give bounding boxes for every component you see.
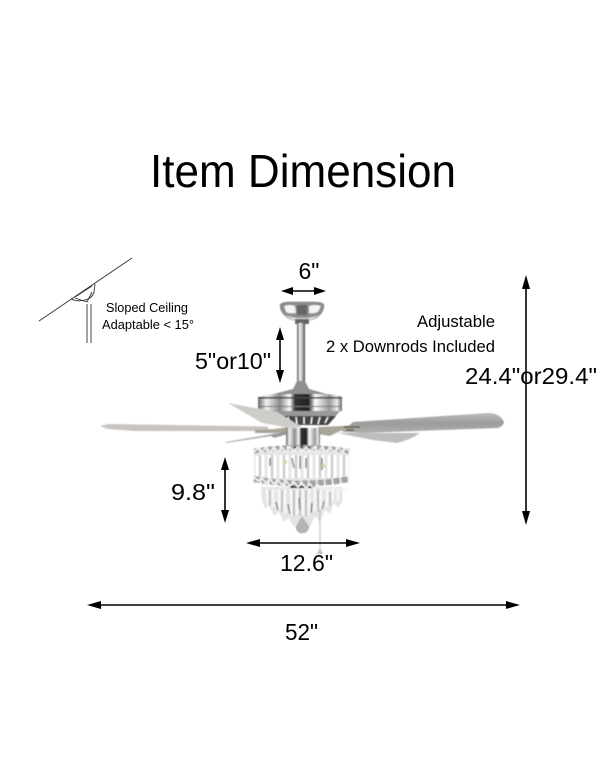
blade brackets [255, 425, 361, 438]
text: adjustable downrods note: 2 x Downrods Included [326, 337, 495, 356]
fan blade: far left long [100, 424, 268, 431]
pull chain [317, 510, 323, 554]
dimension label: light kit width: 12.6" [280, 550, 333, 576]
dimension arrow: light kit height [221, 457, 229, 523]
text: sloped ceiling note [102, 300, 194, 332]
motor housing [258, 381, 342, 425]
crystal chandelier [254, 447, 350, 533]
dimension arrow: light kit width [246, 539, 360, 547]
fan blade: lower left thin [225, 433, 277, 443]
dimension label: 6 inch: 6" [299, 258, 319, 284]
fan blade: upper left [228, 403, 302, 428]
icon: sloped ceiling diagram [39, 258, 132, 343]
ceiling canopy [280, 302, 324, 324]
downrod [297, 323, 305, 383]
light kit cylinder [286, 428, 320, 448]
dimension arrow: overall height [522, 275, 530, 525]
text: sloped ceiling note: Adaptable < 15° [102, 317, 194, 332]
text: sloped ceiling note: Sloped Ceiling [106, 300, 188, 315]
fan blade: right lower [337, 433, 420, 443]
dimension label: overall height: 24.4"or29.4" [465, 363, 597, 389]
text: adjustable downrods note: Adjustable [417, 312, 495, 331]
dimension arrow: downrod 5 or 10 inch [276, 327, 284, 383]
bottom crystal drop [296, 517, 309, 533]
dimension label: downrod: 5"or10" [195, 348, 271, 374]
dimension label: light kit height: 9.8" [171, 479, 215, 505]
upper crystal tier [254, 447, 350, 492]
dimension arrow: 6 inch [281, 287, 326, 295]
dimension arrow: blade span [87, 601, 520, 609]
lower crystal tier [261, 485, 343, 533]
dimension label: blade span: 52" [285, 619, 318, 645]
title: Item Dimension [150, 145, 456, 197]
text: adjustable downrods note [326, 312, 495, 356]
fan blade: right long [342, 413, 504, 433]
ceiling fan illustration [100, 302, 504, 554]
